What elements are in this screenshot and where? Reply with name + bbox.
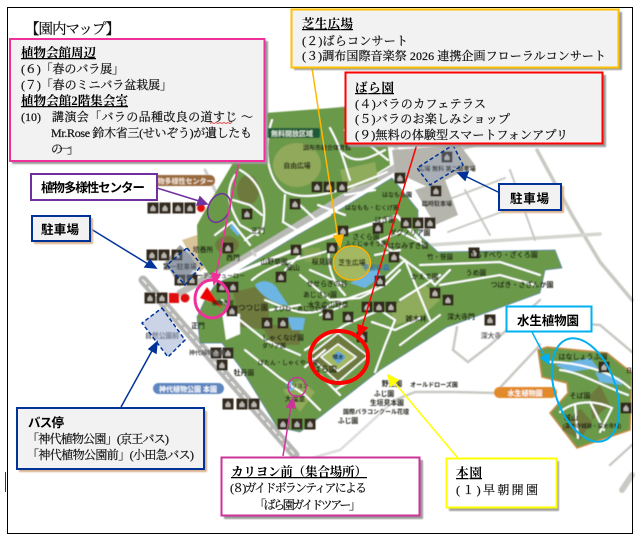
map labels: 生垣見本園	[370, 398, 404, 407]
panel: plant diversity center label	[31, 174, 157, 200]
map pill: aquatic garden: 水生植物園	[508, 388, 542, 398]
map labels: (深大寺城跡・深大寺城)	[563, 422, 621, 430]
arrow: carillon	[283, 398, 295, 456]
panel: right parking label: 駐車場	[510, 191, 549, 206]
panel: lawn plaza	[292, 10, 622, 70]
map pill: main garden	[153, 383, 224, 394]
map pill: free zone	[265, 128, 320, 138]
map labels: さくら園	[352, 232, 380, 241]
panel: aquatic garden label	[506, 306, 592, 332]
map labels: 山野草園	[260, 257, 288, 266]
map icons	[144, 152, 632, 430]
panel: lawn plaza: (２)ばらコンサート	[302, 34, 408, 48]
highlight: plant hall	[195, 280, 229, 318]
map labels: ダリア園	[262, 342, 286, 350]
highlight: carillon	[288, 378, 306, 396]
map labels: 芝生広場	[338, 258, 366, 267]
panel: left parking label	[32, 216, 93, 244]
panel: left parking label: 駐車場	[41, 222, 79, 237]
panel: bus stop	[17, 408, 207, 472]
map labels: ガーデンビューロー	[191, 272, 245, 280]
panel: plant hall area: 植物会館2階集会室	[21, 93, 128, 108]
cursor mark	[5, 472, 6, 492]
panel: carillon meeting place: (８)ガイドボランティアによる	[230, 481, 367, 495]
map labels: せせらぎの谷	[307, 279, 348, 288]
arrow: lawn plaza	[312, 68, 343, 247]
panel: main garden: 本園	[456, 465, 482, 480]
map pill: free zone: 無料開放区域	[271, 129, 313, 138]
panel: plant hall area: 講演会「バラの品種改良の道すじ ～	[52, 109, 253, 124]
map labels: 神代植物公園	[189, 349, 225, 357]
highlight: aquatic garden	[539, 329, 632, 451]
map labels: 培養所	[193, 245, 213, 254]
white block beside main gate	[222, 312, 240, 340]
map labels: 日	[626, 368, 632, 375]
map labels: はなしょうぶ園	[558, 352, 608, 361]
panel: plant hall area: の一」	[51, 142, 79, 156]
panel: rose garden: (４)バラのカフェテラス	[355, 97, 486, 111]
red building: plant hall	[200, 287, 222, 308]
ponds	[230, 222, 622, 391]
arrow: plant diversity center	[157, 188, 207, 205]
map labels: そば園	[570, 391, 590, 400]
map labels: 自由広場	[283, 161, 311, 170]
map labels: ふくじゅそう園	[345, 240, 387, 248]
panel: plant hall area: 植物会館周辺	[21, 45, 96, 60]
highlight: lawn plaza	[334, 246, 370, 280]
map pill: plant diversity center: 植物多様性センター	[150, 176, 214, 186]
panel: carillon meeting place: 「ばら園ガイドツアー」	[254, 498, 361, 512]
arrow: main garden	[388, 375, 457, 457]
highlight: rose garden	[310, 331, 368, 383]
map labels: かえで園	[412, 272, 439, 281]
panel: plant diversity center label: 植物多様性センター	[41, 180, 145, 195]
map labels: ぼたん・しゃくやく園	[258, 359, 318, 367]
map labels: はぎ園	[375, 215, 395, 224]
map labels: 野生園	[382, 379, 402, 388]
map labels: 深大寺	[481, 331, 501, 340]
panel: plant hall area: (７)「春のミニバラ盆栽展」	[21, 77, 172, 92]
map labels: 噴水	[332, 353, 344, 361]
map labels: 平和の森	[362, 263, 390, 272]
park map	[143, 107, 632, 490]
map pill: plant diversity center	[150, 175, 215, 186]
arrow: plant hall	[212, 161, 239, 284]
map labels: 築山	[286, 263, 300, 272]
map labels: はなもも園	[382, 191, 412, 199]
dashed marker: right parking	[417, 145, 463, 185]
map labels: オールドローズ園	[410, 381, 458, 389]
arrow: rose garden	[358, 144, 417, 336]
panel: carillon meeting place: カリヨン前（集合場所）	[231, 464, 367, 479]
panel: aquatic garden label: 水生植物園	[517, 313, 579, 328]
map labels: はなみずき園	[388, 241, 429, 250]
panel: rose garden: (５)バラのお楽しみショップ	[355, 112, 510, 126]
arrow: bus stop	[121, 342, 157, 407]
map labels: 第一駐車場	[163, 262, 197, 271]
map labels: 広場 無料 第二駐車場	[418, 165, 476, 173]
map labels: ふじ園	[338, 417, 358, 425]
map labels: 牡丹園	[234, 369, 254, 377]
map labels: 城山	[564, 413, 578, 422]
panel: bus stop: バス停	[28, 415, 64, 430]
map labels: つつじ園	[238, 303, 268, 312]
panel: rose garden: ばら園	[355, 80, 394, 95]
panel: main garden: (１)早朝開園	[456, 482, 538, 497]
map labels: しゃくなげ園	[262, 333, 304, 342]
map labels: ばら園	[313, 364, 337, 374]
map labels: 自然公園前	[145, 331, 179, 340]
panel: carillon meeting place	[222, 458, 423, 519]
map labels: 大温室	[285, 394, 305, 403]
north block	[197, 107, 390, 275]
water garden	[538, 347, 632, 448]
arrow: right parking	[458, 172, 498, 192]
panel: rose garden	[346, 72, 606, 147]
map labels: 正門	[191, 322, 205, 330]
map labels: さるすべり・ざくろ園	[468, 250, 538, 259]
panel: lawn plaza: (３)調布国際音楽祭 2026 連携企画フローラルコンサート	[302, 48, 606, 63]
roads and surroundings	[143, 108, 632, 490]
map labels: えびね・あじさい園	[273, 305, 327, 313]
map labels: ふじ園	[374, 390, 394, 398]
map labels: うめ園	[466, 268, 486, 277]
dashed marker: bus stop	[142, 308, 185, 357]
lawns and garden patches	[215, 143, 610, 440]
panel: rose garden: (９)無料の体験型スマートフォンアプリ	[355, 127, 568, 142]
map labels: 水生の山野草	[308, 300, 349, 309]
map labels: 雑木林	[406, 314, 426, 323]
map pill: main garden: 神代植物公園 本園	[159, 384, 217, 394]
highlight: plant diversity center	[203, 190, 235, 226]
map labels: はなもも・むくげ園	[345, 204, 399, 212]
map labels: 桜見園	[312, 257, 332, 266]
panel: plant hall area: (10)	[21, 110, 41, 124]
panel: plant hall area	[10, 39, 268, 164]
panel: main garden	[446, 458, 559, 511]
map labels	[145, 144, 632, 430]
map labels: 竹・笹園	[427, 252, 454, 261]
red rest markers	[169, 293, 179, 303]
panel: bus stop: 「神代植物公園前」(小田急バス)	[27, 447, 194, 462]
map labels: 国際バラコンクール花壇	[343, 408, 409, 416]
map labels: あじさい園	[303, 290, 337, 299]
panel: bus stop: 「神代植物公園」(京王バス)	[27, 431, 169, 446]
panel: plant hall area: (６)「春のバラ展」	[21, 62, 124, 76]
map labels: 調布市総合体育館	[303, 144, 351, 152]
map labels: カリヨン	[286, 383, 308, 390]
map labels: ダグノリア園	[390, 228, 431, 237]
map pill: aquatic garden	[494, 387, 557, 398]
arrow: aquatic garden	[532, 332, 549, 364]
rose garden	[309, 333, 368, 382]
south block	[197, 178, 562, 432]
parking lots	[165, 245, 198, 287]
panel: plant hall area: Mr.Rose 鈴木省三(せいぞう)が遺したも	[51, 125, 252, 140]
map labels: 正門	[251, 227, 265, 235]
footpaths	[212, 120, 630, 438]
map labels: 深大寺門	[447, 312, 475, 321]
map labels: つばき・さざんか園	[490, 280, 554, 289]
dashed marker: first parking	[167, 248, 202, 285]
map labels: 植物会館	[212, 299, 234, 307]
panel: lawn plaza: 芝生広場	[302, 16, 353, 31]
map labels: 臨時駐車場	[422, 200, 452, 208]
title: 【園内マップ】	[25, 21, 120, 38]
panel: right parking label	[499, 184, 564, 213]
arrow: left parking	[91, 229, 156, 268]
map labels: 西門	[226, 254, 240, 262]
